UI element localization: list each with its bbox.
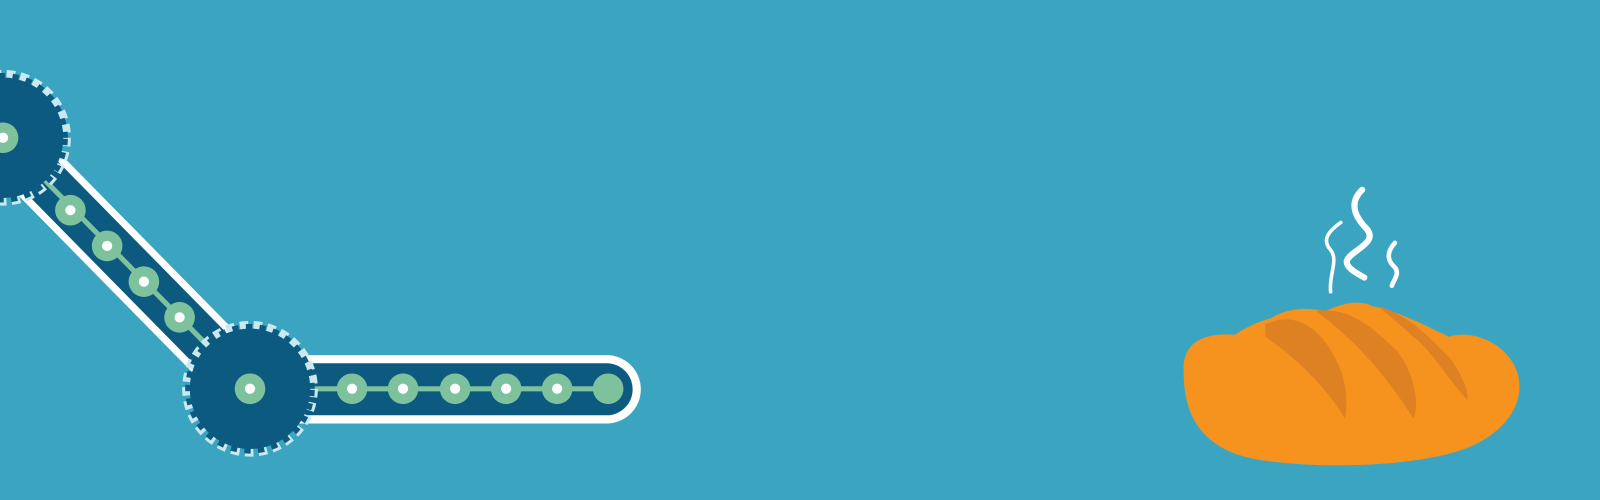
gear: top left [0,77,64,199]
conveyor: horizontal belt [235,355,641,423]
icon: steam [1326,190,1397,292]
conveyor: diagonal belt [3,138,250,389]
icon: bread loaf [1184,303,1519,465]
gear: bottom [189,328,311,450]
